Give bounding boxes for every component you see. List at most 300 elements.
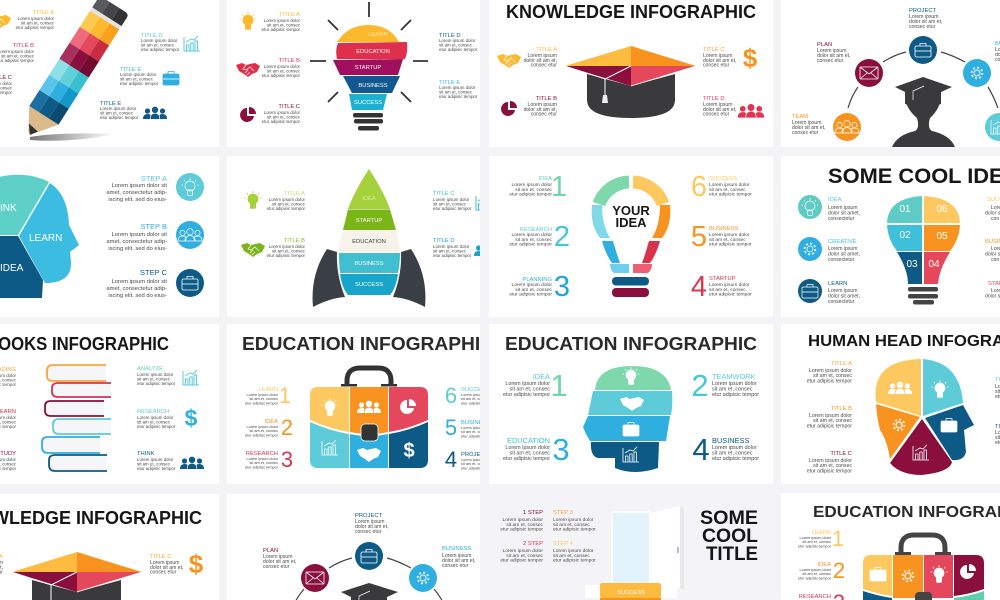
section: startup: [333, 59, 403, 75]
text: body C: sit am et, consec: [813, 463, 852, 469]
step 2: 2: [554, 221, 570, 253]
text: title B: TITLE B: [831, 406, 852, 412]
step 4: Lorem ipsum dolor: [461, 458, 493, 462]
text: business body: Lorem ipsum: [442, 553, 471, 559]
icon: chart: [183, 370, 199, 385]
section: education: [338, 231, 400, 252]
step 6: Lorem ipsum dolor: [709, 182, 750, 188]
icon: people: [180, 457, 204, 469]
icon: people partial: [474, 245, 480, 256]
icon: pie: [240, 107, 256, 122]
text: body D: consec etur: [703, 112, 730, 118]
circle: briefcase: [176, 269, 204, 297]
text: body C: Lorem ipsum dolor: [433, 197, 470, 202]
text: research: RESEARCH: [137, 409, 169, 415]
step 4: sit am et, consec: [709, 287, 746, 293]
text: body B: Lorem ipsum dolor: [264, 64, 301, 69]
section: idea: [348, 169, 390, 209]
bulb side segments: [592, 205, 670, 273]
circle: gear: [409, 564, 437, 592]
step 5: sit am et, consec: [709, 237, 746, 243]
step 2: sit am et, consec: [506, 553, 544, 559]
icon: pie: [501, 101, 517, 116]
text: title E: TITLE E: [120, 67, 141, 73]
text: team body: consec etur: [792, 130, 819, 136]
step 1: [500, 510, 544, 533]
text: creative: CREATIVE: [828, 239, 857, 245]
step 4: PROJECT: [461, 452, 489, 458]
bulb quadrants: 05: [936, 231, 948, 242]
text: body C: etur adipisic tempor: [433, 206, 472, 211]
text: step A body: iscing elit, sed do eius-: [108, 197, 167, 203]
text: right column: con: [991, 216, 999, 222]
bulb quadrants: [887, 196, 960, 284]
step 1: [509, 171, 567, 203]
step 2: etur adipisic tempor: [245, 433, 279, 437]
step 2: RESEARCH: [520, 227, 552, 233]
text: step B: STEP B: [140, 222, 167, 231]
bulb quadrants: 01: [899, 204, 911, 215]
step 1: 1: [550, 368, 568, 403]
text: title D: TITLE D: [703, 96, 725, 102]
step 6: sit am et, consec: [709, 187, 746, 193]
text: plan: PLAN: [263, 548, 278, 554]
text: body C: Lorem ipsum: [703, 53, 732, 59]
text: step B body: Lorem ipsum dolor sit: [112, 232, 167, 238]
step 2: sit am et, consec: [712, 386, 753, 392]
bulb title: IDEA: [615, 215, 647, 230]
bulb ring segments: [599, 182, 663, 204]
step 4: sit am et, consec: [712, 450, 753, 456]
text: body B: etur adipisic tempor: [267, 253, 306, 258]
step 1: Lorem ipsum dolor: [247, 393, 279, 397]
text: body E: etur adipisic tempor: [120, 81, 159, 86]
step 4: 4: [692, 432, 710, 467]
step 1: Lorem ipsum dolor: [502, 517, 543, 523]
head: idea: IDEA: [0, 263, 24, 274]
success book: SUCCESS: [617, 590, 645, 596]
text: think body: etur adipisic tempor: [137, 466, 176, 471]
text: body A: etur adipisic tempor: [267, 206, 306, 211]
icon: briefcase: [163, 72, 179, 85]
step 3: Lorem ipsum dolor: [247, 457, 279, 461]
text: body C: Lorem ipsum: [150, 560, 179, 566]
text: plan body: dolor sit am et,: [817, 53, 850, 59]
text: think: THINK: [137, 451, 155, 457]
text: body A: sit am et, consec: [272, 202, 306, 206]
step 5: BUSINESS: [461, 420, 490, 426]
step 5: etur adipisic tempor: [461, 434, 495, 438]
text: idea body: Lorem ipsum: [828, 205, 857, 211]
heading: SOME: [700, 508, 758, 529]
section: success: [349, 94, 387, 110]
step 1: etur adipisic tempor: [245, 401, 279, 405]
text: title D: TITLE D: [141, 33, 163, 39]
icon: handshake: [497, 54, 521, 68]
head wedge: chart: [890, 419, 952, 475]
step 1: IDEA: [538, 176, 552, 182]
icon: bulb: [244, 191, 262, 208]
step 3: sit am et, consec: [510, 450, 550, 456]
step 4: STEP 4: [553, 541, 574, 547]
step 2: sit am et, consec: [250, 429, 278, 433]
step 4: etur adipisic tempor: [553, 558, 596, 564]
text: body D: etur adipisic tempor: [433, 253, 472, 258]
text: title A: TITLE A: [536, 47, 557, 53]
step 6: Lorem ipsum dolor: [461, 393, 493, 397]
text: body A: Lorem ipsum dolor: [809, 368, 852, 374]
section: startup: STARTUP: [356, 218, 382, 224]
step 2: 2: [833, 558, 845, 583]
head band: chart: [591, 442, 659, 472]
text: body D: sit am et, consec: [439, 42, 473, 48]
text: idea body: dolor sit amet,: [828, 211, 860, 217]
section: learn: LEARN: [368, 32, 388, 38]
text: right column: con: [991, 257, 999, 263]
step 4: STARTUP: [709, 276, 736, 282]
graduate silhouette: [892, 77, 955, 147]
step 2: [509, 221, 570, 253]
step 4: sit am et, consec: [553, 553, 590, 559]
section: business: [343, 76, 400, 93]
text: body A: etur adipisic tempor: [16, 25, 55, 30]
head: think: [0, 175, 49, 235]
step 6: [445, 383, 495, 408]
text: title E second: TITLE E: [100, 101, 121, 107]
circle: project: [355, 542, 383, 570]
heading: EDUCATION INFOGRAPHIC: [242, 334, 494, 354]
bulb quadrants: 02: [899, 230, 911, 241]
step 1: 1 STEP: [523, 510, 543, 516]
text: title C: TITLE C: [433, 191, 455, 197]
step 3: [245, 447, 293, 472]
text: plan body: Lorem ipsum: [817, 48, 846, 54]
head wedge: gear: [876, 404, 920, 459]
step 1: Lorem ipsum dolor: [505, 381, 550, 387]
step 3: 3: [554, 271, 570, 303]
section: education: EDUCATION: [352, 239, 386, 245]
text: title C: TITLE C: [703, 47, 725, 53]
step 1: LEARN: [259, 387, 278, 393]
section: learn: [337, 25, 399, 42]
step 4: BUSINESS: [712, 436, 749, 445]
head wedge: people: [876, 359, 921, 416]
text: body C: consec etur: [150, 570, 177, 576]
step 3: Lorem ipsum dolor: [505, 445, 550, 451]
briefcase body: [310, 387, 428, 468]
bulb quadrants: 06: [936, 204, 948, 215]
text: body B: Lorem ipsum dolor: [809, 413, 852, 419]
panel: education briefcase lower: [781, 493, 1000, 600]
text: body D: dolor sit am et,: [703, 107, 736, 113]
heading: [700, 508, 758, 565]
step 4: etur adipisic tempor: [712, 456, 759, 462]
panel: door success: [500, 506, 758, 600]
text: body E second: Lorem ipsum dolor: [100, 106, 137, 111]
bulb base: [353, 113, 383, 130]
text: title D: TITLE D: [433, 238, 455, 244]
step 5: Lorem ipsum dolor: [461, 426, 493, 430]
step 2: [500, 541, 544, 564]
text: right column: [995, 377, 1000, 446]
step 2: 2: [281, 415, 293, 440]
briefcase handle: [341, 368, 397, 386]
icon: dollar: $: [189, 549, 204, 579]
step 6: 6: [691, 171, 707, 203]
text: title E: TITLE E: [439, 80, 460, 86]
head: think: INK: [0, 203, 17, 214]
step 1: Lorem ipsum dolor: [800, 536, 832, 540]
text: body E: Lorem ipsum dolor: [120, 72, 157, 77]
section: business: BUSINESS: [358, 83, 388, 89]
step 3: [553, 510, 596, 533]
text: body A: sit am et, consec: [267, 22, 301, 28]
text: body C: dolor sit am et,: [150, 565, 183, 571]
text: project body: consec etur: [355, 529, 382, 535]
step 4: 4: [445, 447, 457, 472]
text: idea body: consectetur: [828, 216, 855, 222]
bulb base: [908, 287, 938, 304]
text: title B: TITLE B: [279, 58, 300, 64]
arcs: [294, 558, 444, 600]
text: step A body: Lorem ipsum dolor sit: [112, 183, 167, 189]
step 3: Lorem ipsum dolor: [511, 282, 552, 288]
step 3: [509, 271, 570, 303]
head band: handshake: [588, 391, 672, 415]
icon: handshake: [0, 15, 11, 29]
panel: graduate arc: [781, 0, 1000, 147]
step 1: 1: [832, 526, 844, 551]
text: analyze body: sit am et, consec: [137, 376, 171, 381]
step 2: etur adipisic tempor: [798, 576, 832, 580]
step 1: Lorem ipsum dolor: [511, 182, 552, 188]
text: body D: etur adipisic tempor: [439, 47, 478, 52]
step 3: etur adipisic tempor: [245, 465, 279, 469]
circle: plan: [855, 59, 883, 87]
step 6: [691, 171, 752, 203]
text: plan body: consec etur: [817, 58, 844, 64]
text: title A: TITLE A: [831, 361, 852, 367]
text: analyze body: etur adipisic tempor: [137, 381, 176, 386]
step 5: BUSINESS: [709, 226, 738, 232]
text: title B: TITLE B: [13, 43, 34, 49]
circle: bulb: [176, 173, 204, 201]
briefcase body: $: [403, 440, 415, 462]
text: body E second: etur adipisic tempor: [100, 115, 139, 120]
text: step B body: iscing elit, sed do eius-: [108, 246, 167, 252]
panel: knowledge infographic: [489, 0, 773, 147]
text: step C body: iscing elit, sed do eius-: [108, 293, 167, 299]
text: title A: TITLE A: [279, 12, 300, 18]
text: body C: Lorem ipsum dolor: [809, 458, 852, 464]
panel: rocket: [227, 156, 498, 317]
briefcase handle: [895, 535, 951, 555]
text: body B: dolor sit am et,: [524, 107, 557, 113]
icon: dollar: $: [743, 43, 758, 73]
icon: handshake: [241, 243, 265, 257]
graduation cap: [12, 552, 142, 600]
section: success: [340, 274, 398, 295]
success book: [585, 583, 677, 600]
step 5: 5: [691, 221, 707, 253]
text: body C: Lorem ipsum dolor: [264, 110, 301, 115]
step 1: etur adipisic tempor: [509, 192, 552, 198]
text: body B: sit am et, consec: [1, 54, 35, 58]
step 2: Lorem ipsum dolor: [511, 232, 552, 238]
text: step B body: amet, consectetur adip-: [106, 239, 167, 245]
panel: puzzle head: [0, 156, 219, 317]
head wedge: briefcase: [925, 405, 974, 460]
step 1: [798, 526, 844, 551]
text: plan: PLAN: [817, 42, 832, 48]
text: step C body: amet, consectetur adip-: [106, 286, 167, 292]
text: title C: TITLE C: [150, 554, 172, 560]
step 4: Lorem ipsum dolor: [712, 445, 757, 451]
text: body A: sit am et, consec: [813, 373, 852, 379]
icon: dollar: $: [185, 405, 198, 431]
section: success: SUCCESS: [354, 100, 382, 106]
text: body A: Lorem ipsum dolor: [18, 16, 55, 21]
text: body C: etur adipisic tempor: [807, 468, 852, 474]
briefcase body: [863, 555, 984, 600]
arcs: [848, 52, 998, 108]
step 4: etur adipisic tempor: [461, 466, 495, 470]
text: learn body: consectetur: [828, 299, 855, 305]
step 4: etur adipisic tempor: [709, 292, 752, 298]
section: education: [336, 42, 407, 59]
section: success: SUCCESS: [355, 282, 383, 288]
text: body A: Lorem ipsum: [528, 53, 557, 59]
text: title D: TITLE D: [439, 33, 461, 39]
book stack: [42, 365, 111, 471]
step 6: etur adipisic tempor: [461, 401, 495, 405]
door frame: [611, 511, 651, 585]
text: learn: LEARN: [828, 281, 847, 287]
text: body D: Lorem ipsum dolor: [433, 244, 470, 249]
text: body A: Lorem ipsum dolor: [269, 197, 306, 202]
step 5: Lorem ipsum dolor: [709, 232, 750, 238]
step 3: [799, 590, 845, 600]
text: body C: sit am et, consec: [267, 114, 301, 120]
bulb title: YOUR: [612, 203, 650, 218]
step 3: etur adipisic tempor: [503, 456, 550, 462]
text: body B: sit am et, consec: [272, 248, 306, 254]
text: body D: sit am et, consec: [433, 248, 467, 254]
text: business: BUSINESS: [442, 546, 471, 552]
text: right column: [985, 197, 1000, 300]
step 4: [553, 541, 596, 564]
text: title B: TITLE B: [284, 238, 305, 244]
text: body E: etur adipisic tempor: [439, 94, 478, 99]
section: business: [339, 253, 400, 273]
pencil shadow: [30, 133, 115, 141]
circle: briefcase: [798, 279, 822, 303]
step 1: 1: [279, 383, 291, 408]
section: idea: IDEA: [362, 196, 376, 202]
step 3: STEP 3: [553, 510, 573, 516]
step 6: SUCCESS: [709, 176, 737, 182]
step 2: etur adipisic tempor: [509, 242, 552, 248]
bulb quadrants: 03: [906, 259, 918, 270]
pencil: [16, 0, 129, 145]
heading: TITLE: [706, 544, 758, 565]
text: body B: etur adipisic tempor: [807, 423, 852, 429]
circle: plan: [301, 564, 329, 592]
text: project body: Lorem ipsum: [355, 519, 384, 525]
text: analyze: ANALYZE: [137, 366, 163, 372]
step 2: Lorem ipsum dolor: [712, 381, 757, 387]
step 3: [503, 432, 570, 467]
step 3: PLANNING: [522, 277, 552, 283]
bulb rays: [310, 2, 428, 102]
icon: people: [738, 104, 764, 118]
text: body E: Lorem ipsum dolor: [439, 85, 476, 90]
step 2: etur adipisic tempor: [500, 558, 543, 564]
text: body D: sit am et, consec: [141, 42, 175, 48]
icon: handshake: [236, 63, 260, 77]
text: team body: Lorem ipsum: [792, 120, 821, 126]
panel: knowledge infographic lower: [0, 494, 219, 600]
text: analyze body: Lorem ipsum dolor: [137, 372, 174, 377]
step 4: [691, 271, 752, 303]
text: body A: etur adipisic tempor: [807, 378, 852, 384]
icon: bulb: [240, 12, 256, 29]
icon: people: [143, 107, 167, 119]
step 3: RESEARCH: [246, 451, 278, 457]
step 3: sit am et, consec: [515, 287, 553, 293]
step 1: etur adipisic tempor: [500, 527, 543, 533]
text: creative body: dolor sit amet,: [828, 252, 860, 258]
text: project body: consec etur: [909, 24, 936, 30]
text: project: PROJECT: [355, 513, 383, 519]
text: body D: Lorem ipsum dolor: [439, 38, 476, 43]
step 1: 1: [551, 171, 567, 203]
step 1: sit am et, consec: [515, 187, 553, 193]
circle: chart: [985, 113, 1000, 141]
step 2: sit am et, consec: [515, 237, 553, 243]
text: team body: dolor sit am et,: [792, 125, 825, 131]
text: body A: sit am et, consec: [21, 20, 55, 26]
text: body A: consec etur: [531, 63, 557, 69]
step 4: 4: [691, 271, 707, 303]
step 6: sit am et, consec: [461, 397, 490, 401]
step 3: Lorem ipsum dolor: [553, 517, 594, 523]
step 5: etur adipisic tempor: [709, 242, 752, 248]
text: body E: sit am et, consec: [439, 90, 473, 94]
step 1: sit am et, consec: [506, 522, 544, 528]
text: body A: Lorem ipsum dolor: [264, 18, 301, 23]
step 2: etur adipisic tempor: [712, 392, 759, 398]
step 4: Lorem ipsum dolor: [709, 282, 750, 288]
text: plan body: Lorem ipsum: [263, 554, 292, 560]
rocket fins: [313, 249, 425, 307]
step 5: [691, 221, 752, 253]
step 2: Lorem ipsum dolor: [800, 568, 832, 572]
text: body C: dolor sit am et,: [703, 58, 736, 64]
icon: chart: [184, 36, 200, 51]
step 2: Lorem ipsum dolor: [502, 548, 543, 554]
step 3: etur adipisic tempor: [509, 292, 552, 298]
text: body B: Lorem ipsum: [528, 102, 557, 108]
text: body B: consec etur: [531, 112, 557, 118]
head: learn: [19, 183, 79, 283]
text: body C: etur adipisic tempor: [262, 119, 301, 124]
panel: pencil infographic: [0, 0, 219, 147]
step 1: sit am et, consec: [802, 540, 831, 544]
circle: project: [909, 36, 937, 64]
heading: KNOWLEDGE INFOGRAPHIC: [506, 2, 756, 22]
step 6: 6: [445, 383, 457, 408]
